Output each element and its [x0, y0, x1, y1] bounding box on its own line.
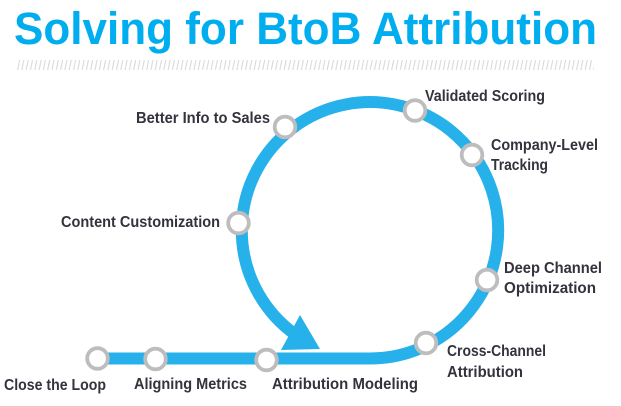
node: Content Customization [228, 213, 249, 233]
node: Deep Channel Optimization [477, 270, 497, 290]
label: Deep Channel Optimization: Optimization [504, 280, 596, 297]
node: Aligning Metrics [145, 349, 166, 369]
loop track [97, 102, 498, 358]
node: Attribution Modeling [256, 350, 277, 370]
label: Cross-Channel Attribution: Cross-Channel [447, 343, 546, 360]
label: Validated Scoring: Validated Scoring [425, 88, 545, 105]
node: Validated Scoring [405, 100, 425, 121]
label: Better Info to Sales: Better Info to Sales [136, 110, 270, 127]
label: Close the Loop: Close the Loop [4, 377, 106, 394]
label: Attribution Modeling: Attribution Modeling [272, 376, 418, 393]
label: Company-Level Tracking: Company-Level [491, 137, 598, 154]
label: Aligning Metrics: Aligning Metrics [134, 376, 247, 393]
arrowhead [281, 315, 320, 350]
label: Company-Level Tracking: Tracking [491, 157, 548, 174]
node: Cross-Channel Attribution [416, 333, 436, 353]
node: Close the Loop [87, 348, 108, 369]
label: Deep Channel Optimization: Deep Channel [504, 260, 602, 277]
label: Content Customization: Content Customization [61, 214, 220, 231]
label: Cross-Channel Attribution: Attribution [447, 364, 523, 381]
title: Solving for BtoB Attribution [14, 3, 597, 54]
node: Better Info to Sales [275, 117, 295, 137]
node: Company-Level Tracking [462, 145, 482, 165]
